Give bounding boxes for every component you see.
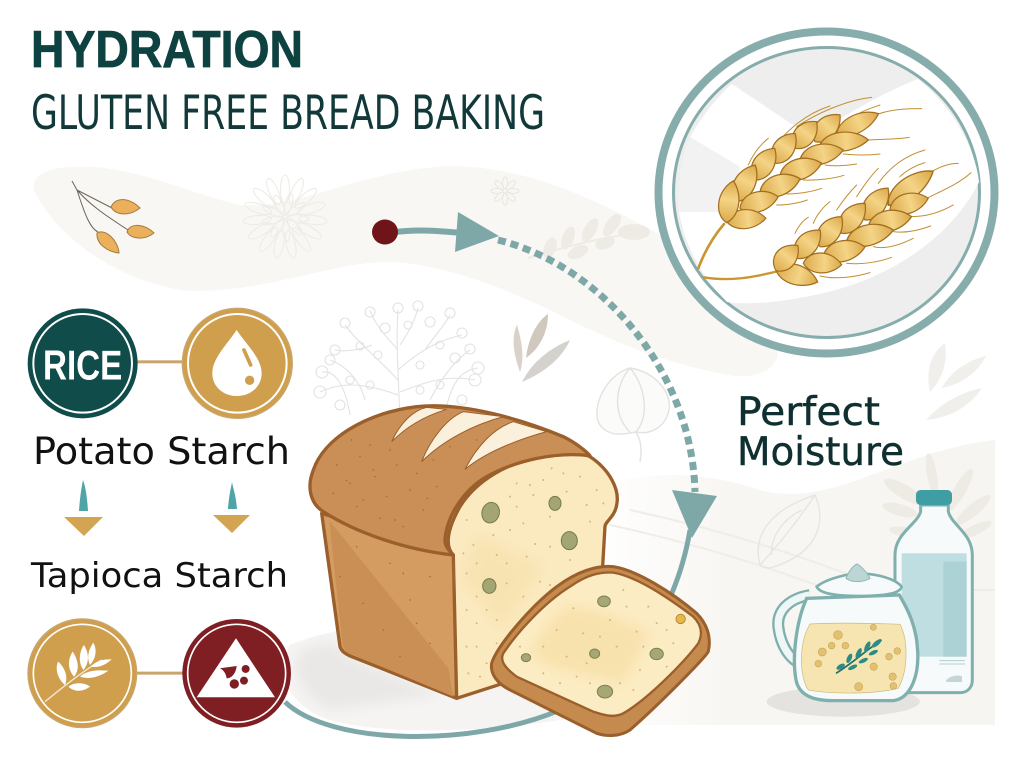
jug body	[794, 595, 918, 701]
label: perfect moisture: Perfect	[737, 390, 880, 435]
bread loaf and slice	[310, 406, 709, 735]
seeds in loaf	[480, 496, 577, 593]
background hill panel	[590, 440, 995, 725]
connector	[135, 672, 185, 675]
decorative seeds sprig	[72, 181, 154, 253]
lower ear grains	[881, 162, 939, 212]
label: potato starch: Potato Starch	[33, 430, 290, 473]
decorative tree	[314, 301, 484, 420]
badge: leaf sprig	[28, 619, 137, 728]
label: perfect moisture	[737, 390, 904, 475]
decorative flower small	[491, 177, 519, 205]
plate under bread	[284, 624, 640, 730]
label: perfect moisture: Moisture	[737, 430, 904, 475]
stems	[698, 224, 724, 268]
loaf front face	[448, 453, 617, 698]
medallion inner disc	[674, 48, 980, 338]
decorative right leaves	[926, 343, 986, 420]
contents dots	[815, 624, 901, 691]
badge: rice: RICE	[43, 341, 122, 388]
seeds in slice	[521, 596, 663, 698]
flow arrow: red dot with head	[372, 212, 499, 252]
label: tapioca starch: Tapioca Starch	[30, 556, 288, 596]
slice crust	[491, 566, 709, 735]
jug contents	[801, 623, 906, 693]
dashed flow curve	[498, 240, 695, 492]
connector	[137, 360, 187, 363]
herb sprig	[835, 638, 883, 673]
water bottle	[895, 490, 972, 693]
slash cuts	[392, 407, 447, 442]
jug lid	[817, 573, 902, 596]
jug handle	[778, 595, 810, 662]
slice crumb	[502, 572, 701, 716]
badge: rice	[28, 308, 138, 418]
yellow seed	[676, 614, 685, 624]
jug and bottle	[767, 490, 972, 717]
badge: warning triangle	[182, 619, 291, 728]
slice speckles	[520, 590, 673, 690]
decorative leaf outline	[758, 495, 820, 568]
loaf side shade	[329, 521, 453, 697]
arrow: right down	[213, 482, 250, 533]
decorative fan leaves behind bottle	[881, 452, 994, 542]
subtitle: gluten free bread baking: GLUTEN FREE BREAD BAKING	[31, 86, 545, 141]
decorative onion outline	[597, 368, 669, 462]
medallion left band	[678, 137, 740, 212]
background faint stripes	[610, 510, 995, 590]
front face light patch	[460, 533, 543, 630]
medallion outer ring	[658, 32, 994, 354]
crust speckles	[333, 440, 477, 657]
crumb speckles	[463, 468, 603, 677]
icon row: bottom	[28, 619, 291, 728]
loaf dome	[310, 406, 590, 555]
decorative leaf sprig	[528, 211, 650, 262]
decorative beige leaves	[514, 314, 570, 382]
icon row: top	[28, 308, 292, 418]
slice shading	[530, 607, 650, 683]
decorative flower left	[243, 175, 327, 259]
ground shadow	[767, 687, 920, 717]
flow arrowhead down	[672, 490, 717, 538]
arrow: left down	[64, 480, 103, 536]
solid flow curve under loaf	[285, 530, 690, 737]
title: hydration: HYDRATION	[31, 21, 303, 79]
wheat medallion	[658, 32, 994, 354]
medallion white swoosh	[679, 79, 979, 303]
loaf side	[322, 513, 457, 698]
upper ear grains	[832, 105, 882, 142]
wheat ear: upper and lower	[698, 97, 971, 290]
background wave band	[34, 166, 778, 376]
badge: water drop	[182, 308, 292, 418]
